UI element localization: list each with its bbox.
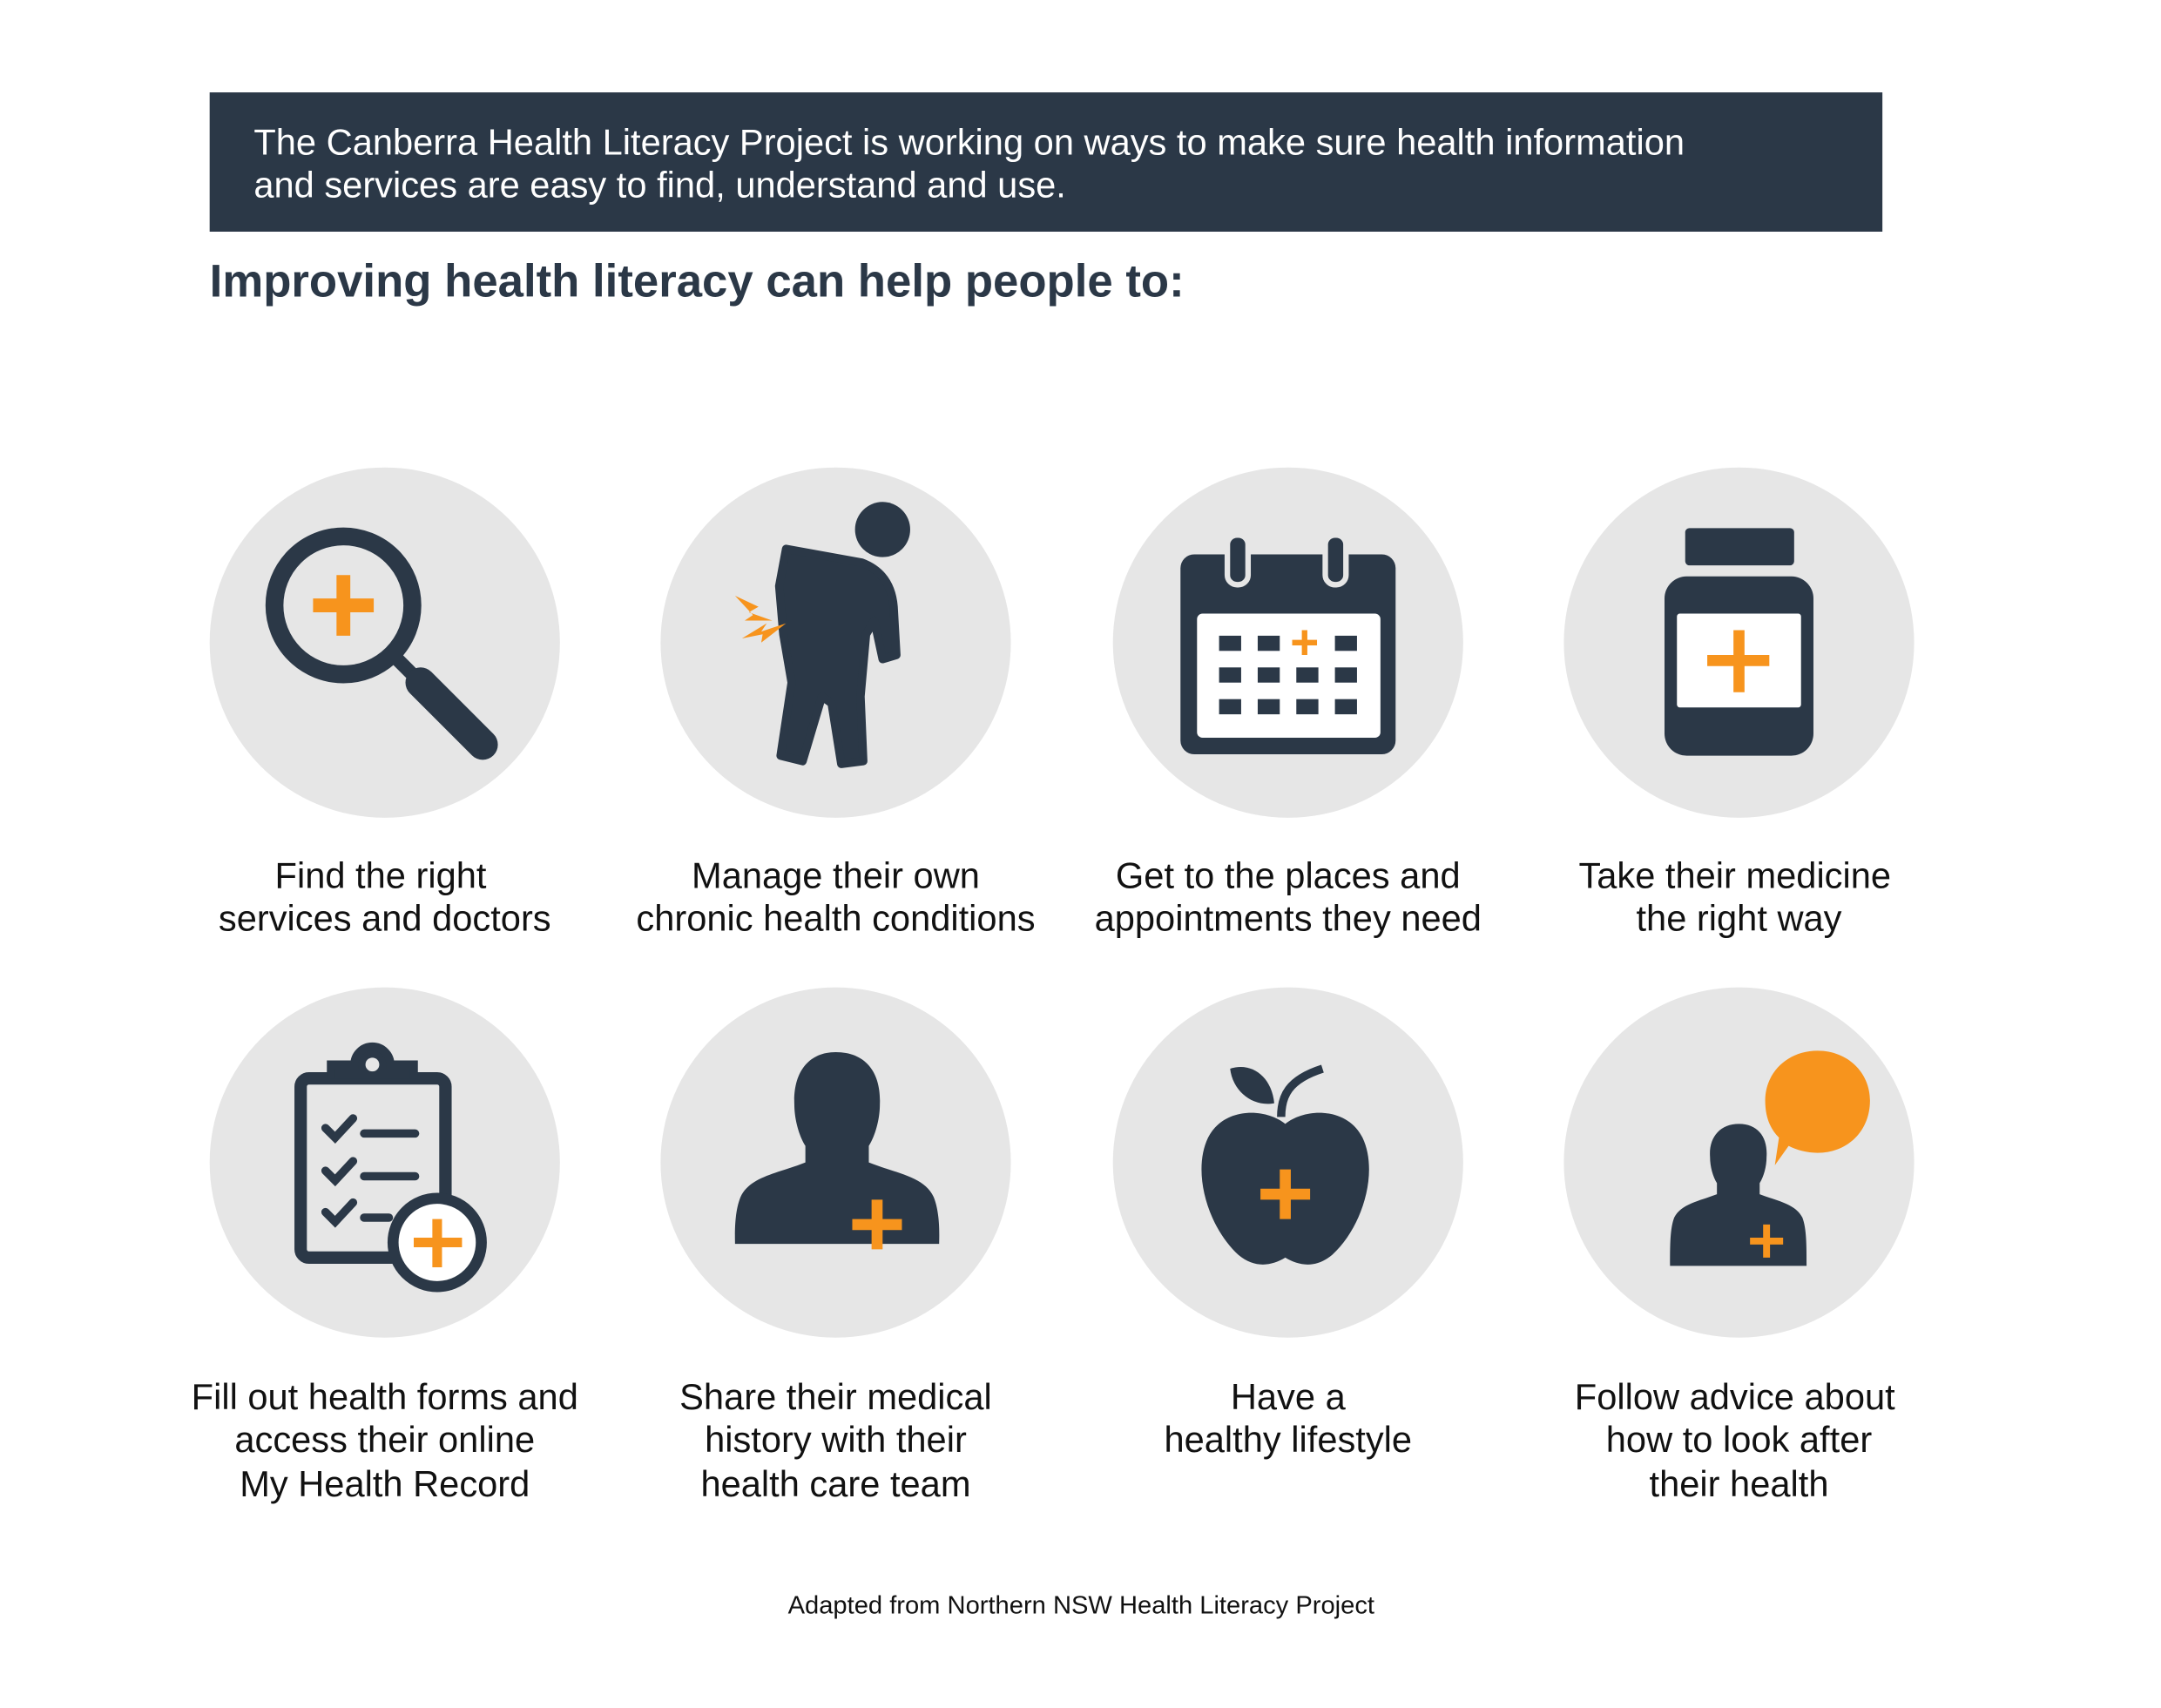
panel: medical history [660, 988, 1011, 1504]
heading: Improving health literacy can help people to: [210, 255, 1185, 307]
panel: chronic conditions [636, 468, 1036, 939]
panel: medicine: Take their medicine [1578, 855, 1891, 896]
panel: follow advice: how to look after [1606, 1419, 1872, 1460]
panel: find services: services and doctors [219, 898, 551, 939]
panel: healthy lifestyle: Have a [1231, 1376, 1347, 1417]
panel: appointments: appointments they need [1095, 898, 1482, 939]
panel: medical history: history with their [705, 1419, 967, 1460]
panel: appointments: Get to the places and [1116, 855, 1461, 896]
panel: healthy lifestyle: healthy lifestyle [1164, 1419, 1412, 1460]
panel: medicine: the right way [1636, 898, 1842, 939]
panel: healthy lifestyle [1113, 988, 1463, 1460]
icon: apple [1201, 1067, 1369, 1265]
icon: magnifier [274, 537, 483, 745]
panel: medical history: health care team [700, 1463, 971, 1504]
panel: find services: Find the right [275, 855, 487, 896]
panel: health forms: My Health Record [240, 1463, 530, 1504]
panel: health forms: access their online [234, 1419, 535, 1460]
icon: medicine bottle [1665, 528, 1813, 756]
panel: follow advice: Follow advice about [1575, 1376, 1895, 1417]
panel: medical history: Share their medical [679, 1376, 992, 1417]
footer: Adapted from Northern NSW Health Literacy Project [788, 1591, 1374, 1619]
panel: health forms: Fill out health forms and [192, 1376, 578, 1417]
icon: person bust [735, 1052, 939, 1249]
panel: follow advice: their health [1650, 1463, 1828, 1504]
icon: calendar [1180, 535, 1395, 754]
icon: clipboard [301, 1047, 482, 1286]
icon: person with speech bubble [1670, 1050, 1870, 1266]
panel: appointments [1095, 468, 1482, 939]
banner [210, 92, 1882, 232]
panel: chronic conditions: Manage their own [692, 855, 980, 896]
panel: chronic conditions: chronic health conditions [636, 898, 1036, 939]
icon: person in pain [735, 502, 910, 764]
banner: and services are easy to find, understand and use. [253, 164, 1066, 205]
banner: The Canberra Health Literacy Project is working on ways to make sure health information [253, 121, 1685, 162]
panel: medicine [1563, 468, 1915, 939]
panel: follow advice [1563, 988, 1915, 1504]
panel: health forms [192, 988, 578, 1504]
panel: find services [210, 468, 560, 939]
